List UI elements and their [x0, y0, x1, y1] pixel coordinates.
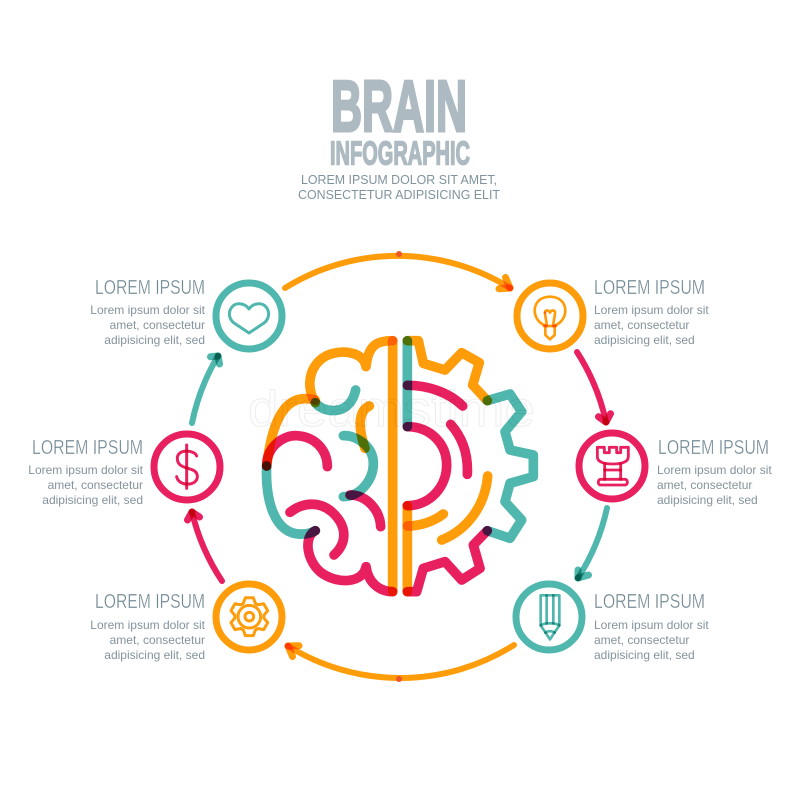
- icon: pencil: [516, 584, 582, 650]
- arrow: right pink: [577, 352, 610, 422]
- text block: top right: Lorem ipsum dolor sit: [594, 303, 709, 317]
- icon: dollar: [154, 434, 220, 500]
- text block: bottom left: [90, 591, 206, 662]
- text block: middle left: amet, consectetur: [48, 478, 143, 492]
- text block: top left: amet, consectetur: [110, 318, 205, 332]
- text block: bottom right: Lorem ipsum dolor sit: [594, 618, 709, 632]
- text block: bottom right: amet, consectetur: [594, 633, 689, 647]
- text block: top right: adipisicing elit, sed: [594, 333, 695, 347]
- text block: top left: LOREM IPSUM: [95, 277, 205, 299]
- arrow: bottom orange: [288, 645, 514, 682]
- arrow: right teal: [578, 508, 607, 578]
- title: [330, 67, 470, 172]
- text block: middle right: Lorem ipsum dolor sit: [657, 463, 772, 477]
- arrow: left teal: [192, 356, 220, 423]
- text block: middle left: adipisicing elit, sed: [42, 493, 143, 507]
- arrow: top orange: [285, 251, 510, 289]
- icon: light bulb: [517, 283, 583, 349]
- text block: bottom left: adipisicing elit, sed: [104, 648, 205, 662]
- text block: middle right: [657, 437, 772, 507]
- text block: bottom left: Lorem ipsum dolor sit: [90, 618, 206, 632]
- text block: middle right: LOREM IPSUM: [658, 437, 769, 459]
- text block: bottom right: LOREM IPSUM: [594, 591, 705, 613]
- subtitle: CONSECTETUR ADIPISICING ELIT: [298, 188, 500, 202]
- text block: bottom left: amet, consectetur: [110, 633, 205, 647]
- text block: bottom right: adipisicing elit, sed: [594, 648, 695, 662]
- text block: bottom left: LOREM IPSUM: [95, 591, 205, 613]
- text block: top left: Lorem ipsum dolor sit: [90, 303, 206, 317]
- brain left hemisphere: [266, 341, 393, 592]
- icon: gear: [216, 584, 282, 650]
- title: INFOGRAPHIC: [330, 134, 470, 172]
- text block: top right: LOREM IPSUM: [594, 277, 705, 299]
- text block: middle right: adipisicing elit, sed: [657, 493, 758, 507]
- text block: top left: adipisicing elit, sed: [104, 333, 205, 347]
- text block: top right: [594, 277, 709, 347]
- title: BRAIN: [331, 67, 467, 147]
- subtitle: [298, 173, 500, 202]
- brain right hemisphere gear: [407, 341, 533, 592]
- subtitle: LOREM IPSUM DOLOR SIT AMET,: [301, 173, 497, 187]
- text block: top left: [90, 277, 206, 347]
- text block: middle left: Lorem ipsum dolor sit: [28, 463, 144, 477]
- text block: middle left: LOREM IPSUM: [32, 437, 143, 459]
- icon: heart: [216, 283, 282, 349]
- text block: middle right: amet, consectetur: [657, 478, 752, 492]
- text block: middle left: [28, 437, 144, 507]
- watermark: dreamstime: [248, 381, 535, 437]
- arrow: left pink: [188, 512, 222, 581]
- text block: top right: amet, consectetur: [594, 318, 689, 332]
- text block: bottom right: [594, 591, 709, 662]
- icon: chess rook: [579, 433, 645, 499]
